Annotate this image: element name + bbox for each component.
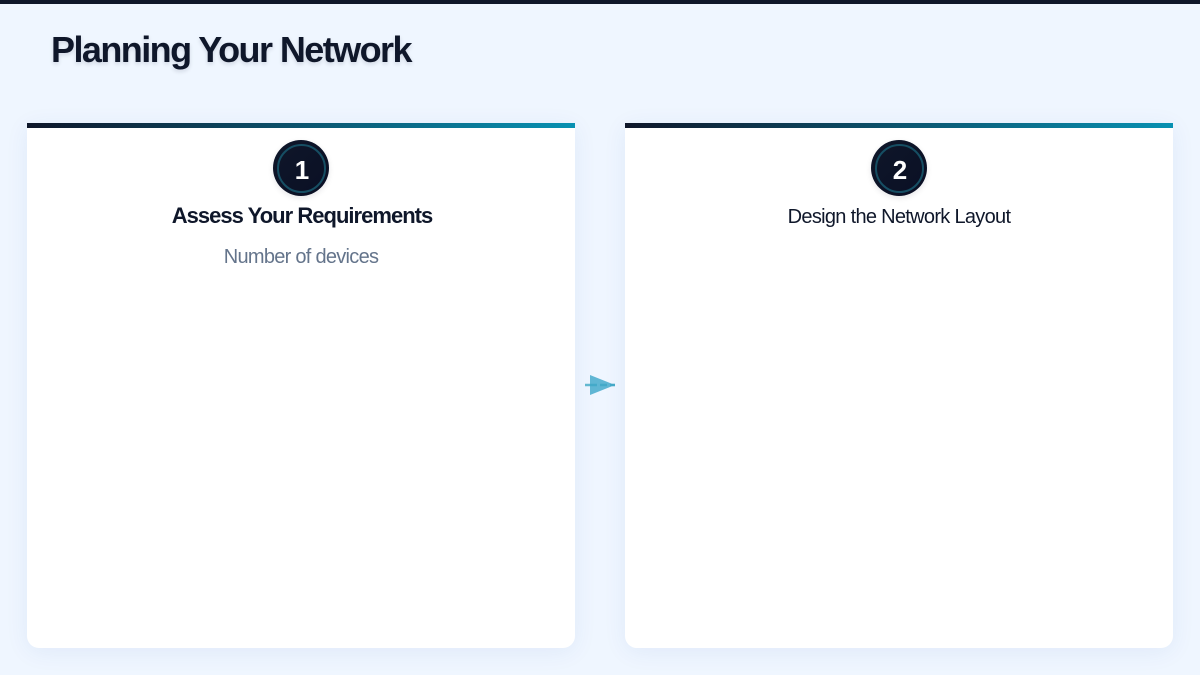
step 1 number badge <box>273 140 329 196</box>
step 1 heading: Assess Your Requirements <box>172 203 432 228</box>
step 1 detail text: Number of devices <box>224 246 378 268</box>
panel 2 gradient top bar <box>625 123 1173 128</box>
step 2 number badge: 2 <box>893 155 907 185</box>
panel: step 2 <box>625 123 1173 648</box>
step 1 number badge: 1 <box>295 155 309 185</box>
top accent bar <box>0 0 1200 4</box>
panel 1 gradient top bar <box>27 123 575 128</box>
title: Planning Your Network <box>51 29 411 70</box>
step 2 heading: Design the Network Layout <box>788 206 1010 228</box>
step 2 number badge <box>871 140 927 196</box>
arrow between steps <box>585 375 615 395</box>
panel: step 1 <box>27 123 575 648</box>
